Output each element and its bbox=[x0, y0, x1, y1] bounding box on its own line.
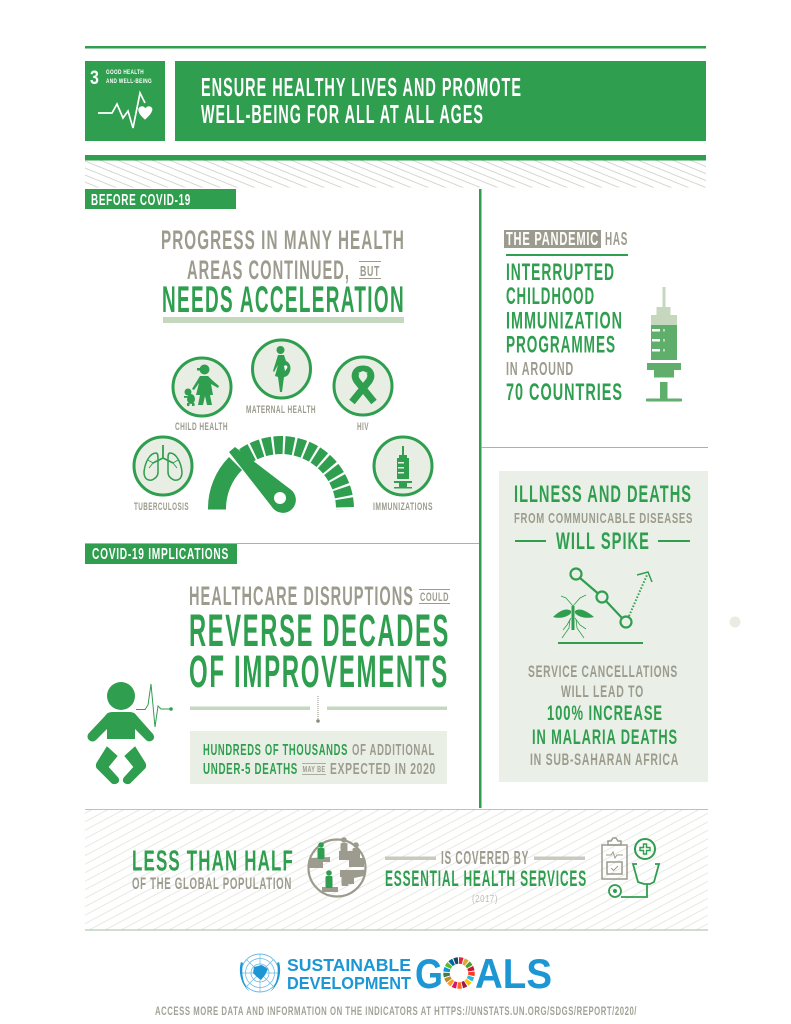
heading: reverse decades of improvements bbox=[189, 581, 450, 697]
callout: under-5 deaths bbox=[190, 731, 447, 784]
logo: sustainable development goals: DEVELOPMENT bbox=[287, 973, 411, 993]
panel: pandemic immunization text: PROGRAMMES bbox=[506, 332, 616, 358]
text: is covered by essential health services: (2017) bbox=[472, 893, 498, 905]
panel: illness and deaths will spike: 100% INCREASE bbox=[547, 702, 663, 725]
logo: sustainable development goals: G bbox=[415, 950, 443, 997]
title banner: ENSURE HEALTHY LIVES AND PROMOTE bbox=[201, 72, 522, 102]
text: is covered by essential health services: ESSENTIAL HEALTH SERVICES bbox=[385, 866, 587, 891]
heading: reverse decades of improvements: REVERSE DECADES bbox=[189, 605, 450, 656]
icon: immunizations syringe bbox=[374, 437, 432, 495]
panel: pandemic immunization text: THE PANDEMIC bbox=[506, 229, 599, 249]
callout: under-5 deaths: EXPECTED IN 2020 bbox=[330, 761, 436, 778]
callout: under-5 deaths: MAY BE bbox=[302, 764, 326, 774]
icon labels: TUBERCULOSIS bbox=[134, 501, 189, 513]
text: less than half: OF THE GLOBAL POPULATION bbox=[132, 874, 292, 893]
heading: reverse decades of improvements: HEALTHCARE DISRUPTIONS bbox=[189, 581, 414, 611]
panel: pandemic immunization text: IMMUNIZATION bbox=[506, 308, 623, 334]
panel: pandemic immunization text: IN AROUND bbox=[506, 359, 574, 379]
panel: pandemic immunization text: CHILDHOOD bbox=[506, 283, 595, 310]
logo: sustainable development goals: SUSTAINABLE bbox=[287, 955, 411, 975]
section label: covid-19 implications: COVID-19 IMPLICATIONS bbox=[92, 546, 229, 563]
callout: under-5 deaths: HUNDREDS OF THOUSANDS bbox=[203, 742, 348, 759]
SDG 3 icon tile: GOOD HEALTH bbox=[106, 69, 144, 76]
section label: covid-19 implications bbox=[85, 544, 237, 564]
icon: hiv ribbon bbox=[334, 357, 392, 415]
panel: illness and deaths will spike: IN MALARIA DEATHS bbox=[532, 726, 678, 749]
title banner: WELL-BEING FOR ALL AT ALL AGES bbox=[201, 99, 484, 129]
icon: child health bbox=[173, 358, 231, 416]
logo: sustainable development goals: ALS bbox=[475, 950, 552, 997]
heading: reverse decades of improvements: COULD bbox=[420, 590, 449, 604]
icon: global population circle bbox=[308, 837, 366, 896]
SDG 3 icon tile: 3 bbox=[90, 68, 100, 89]
panel: pandemic immunization text: INTERRUPTED bbox=[506, 259, 615, 286]
heading: reverse decades of improvements: OF IMPROVEMENTS bbox=[189, 646, 449, 697]
panel: illness and deaths will spike: WILL LEAD TO bbox=[561, 682, 644, 701]
panel: illness and deaths will spike: FROM COMMUNICABLE DISEASES bbox=[514, 510, 693, 527]
text: is covered by essential health services: IS COVERED BY bbox=[441, 848, 529, 868]
logo: sustainable development goals bbox=[287, 950, 552, 997]
icon: maternal health bbox=[252, 340, 310, 398]
icon: clipboard and stethoscope bbox=[602, 838, 659, 897]
heading: progress needs acceleration bbox=[161, 225, 405, 323]
icon labels: CHILD HEALTH bbox=[175, 421, 228, 433]
icon: sdg colour wheel bbox=[441, 955, 477, 991]
line chart with rising arrow bbox=[570, 568, 652, 628]
heading: progress needs acceleration: NEEDS ACCELERATION bbox=[162, 279, 405, 320]
callout: under-5 deaths: OF ADDITIONAL bbox=[352, 742, 435, 759]
heading: progress needs acceleration: AREAS CONTINUED, bbox=[187, 255, 350, 285]
icon: large syringe bbox=[646, 287, 682, 402]
divider with dotted pin bbox=[190, 696, 447, 723]
panel: illness and deaths will spike: SERVICE CANCELLATIONS bbox=[528, 662, 678, 681]
icon: mosquito bbox=[553, 595, 594, 638]
text: less than half: LESS THAN HALF bbox=[132, 846, 294, 878]
panel: pandemic immunization text bbox=[504, 229, 628, 406]
panel: illness and deaths will spike bbox=[499, 471, 708, 782]
panel: pandemic immunization text: HAS bbox=[605, 229, 628, 249]
title banner bbox=[175, 61, 706, 141]
heading: progress needs acceleration: PROGRESS IN MANY HEALTH bbox=[161, 225, 405, 255]
icon: tuberculosis lungs bbox=[134, 437, 192, 495]
panel: pandemic immunization text: 70 COUNTRIES bbox=[506, 379, 623, 406]
text: less than half bbox=[132, 846, 294, 893]
section label: before covid-19: BEFORE COVID-19 bbox=[91, 192, 191, 209]
panel: illness and deaths will spike: IN SUB-SAHARAN AFRICA bbox=[530, 750, 679, 769]
icon labels: IMMUNIZATIONS bbox=[373, 501, 433, 513]
icon labels: MATERNAL HEALTH bbox=[246, 404, 316, 416]
SDG 3 icon tile: AND WELL-BEING bbox=[106, 78, 152, 85]
gauge chart bbox=[208, 445, 345, 513]
SDG 3 icon tile bbox=[85, 61, 165, 141]
logo: un emblem bbox=[240, 954, 280, 992]
icon labels: HIV bbox=[357, 421, 369, 433]
heading: progress needs acceleration: BUT bbox=[360, 263, 380, 280]
callout: under-5 deaths: UNDER-5 DEATHS bbox=[203, 761, 298, 778]
icon labels bbox=[134, 404, 433, 513]
panel: illness and deaths will spike: WILL SPIKE bbox=[556, 528, 650, 555]
icon: baby with heartbeat bbox=[88, 682, 173, 784]
text: is covered by essential health services bbox=[385, 848, 587, 905]
